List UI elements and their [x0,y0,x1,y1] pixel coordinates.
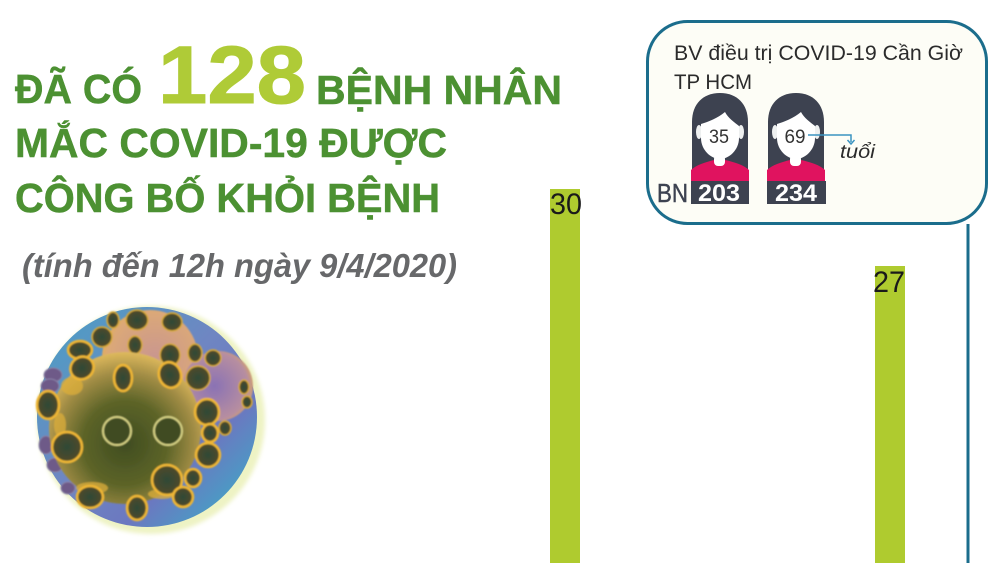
hospital name: BV điều trị COVID-19 Cần Giờ [674,42,963,65]
title line 3: CÔNG BỐ KHỎI BỆNH [15,175,440,221]
title line 1 end: BỆNH NHÂN [316,67,562,113]
right sphere [183,351,253,421]
age arrow [808,135,854,144]
left purple spikes [39,368,75,494]
main sphere [49,352,201,504]
callout: hospital patients [648,22,986,224]
age label: tuổi [840,142,876,163]
yellow shadows [54,377,176,499]
back spikes [92,310,252,435]
patient 203: 35 [709,127,729,148]
main spikes [37,341,220,520]
bar 30 [550,188,582,563]
title [15,30,562,221]
patient 234: 69 [784,127,806,148]
patient 203 [691,93,749,207]
patient 203: 203 [698,180,740,207]
big number 128: 128 [158,30,306,121]
patient 234 [767,93,826,207]
virus illustration [37,306,265,534]
connector line [966,224,970,563]
back sphere [102,310,198,406]
bar 30: 30 [550,188,582,221]
bar 27: 27 [873,266,905,299]
patient 234: 234 [775,180,818,207]
hospital name: TP HCM [674,71,752,94]
surface rings [103,417,182,445]
BN label: BN [657,178,688,208]
title line 2: MẮC COVID-19 ĐƯỢC [15,120,447,166]
subtitle date: (tính đến 12h ngày 9/4/2020) [22,247,457,284]
title line 1 start: ĐÃ CÓ [15,66,142,112]
bar 27 [873,266,905,563]
